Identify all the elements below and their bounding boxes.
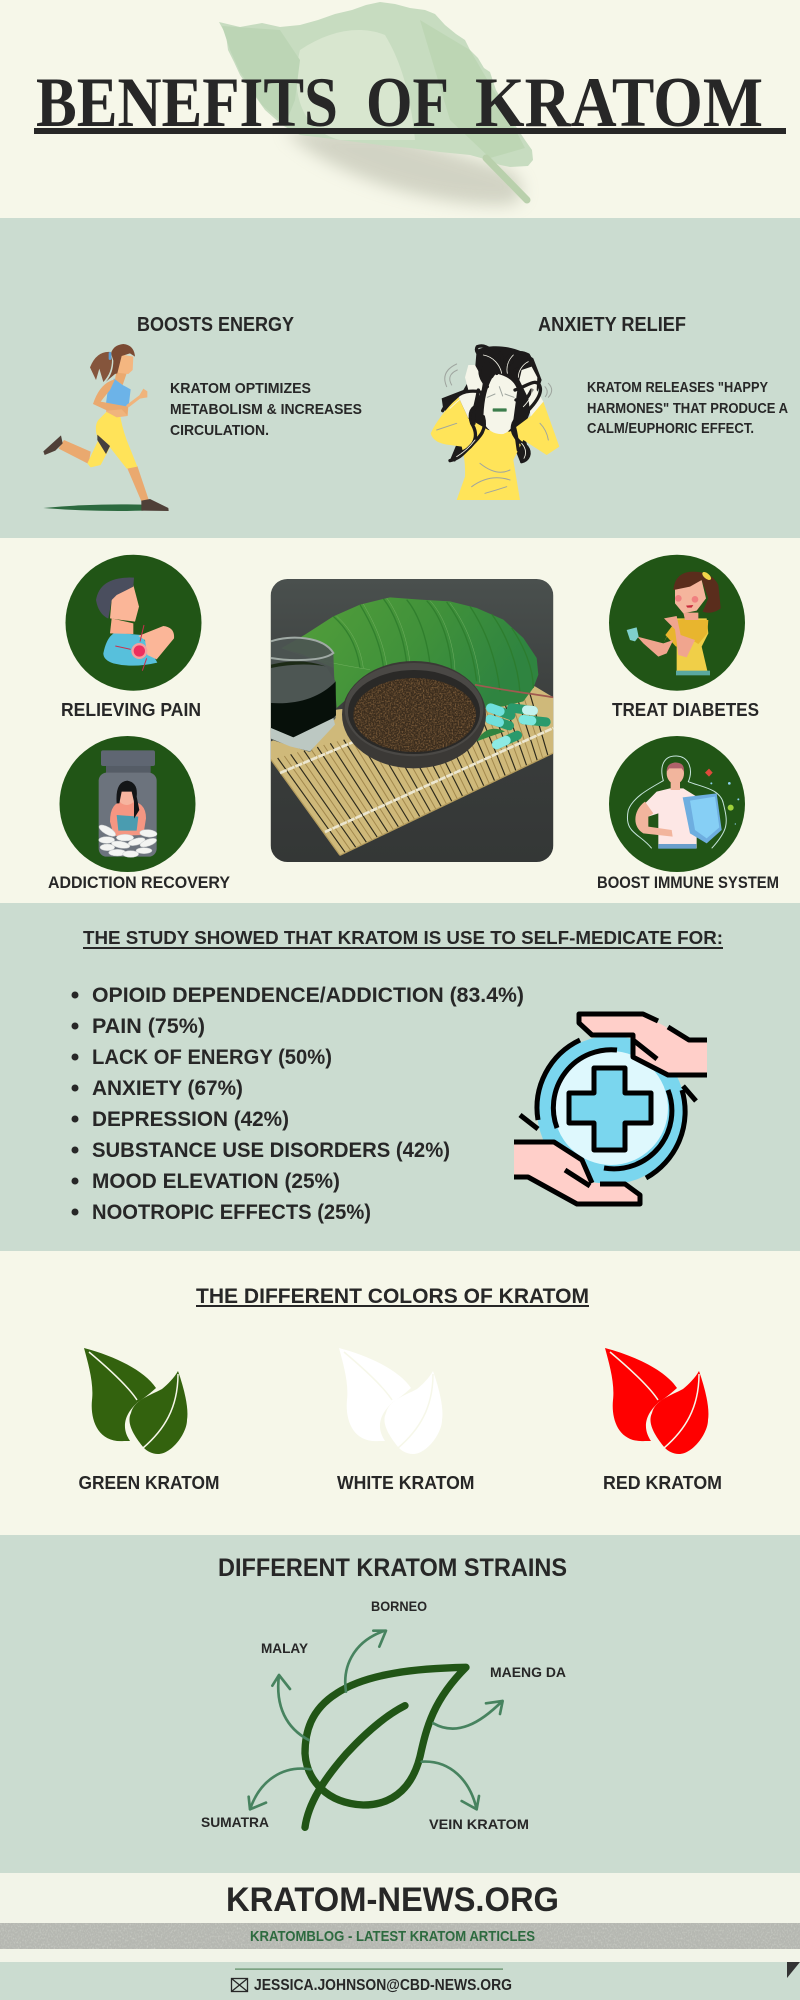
- label: maeng da: MAENG DA: [490, 1664, 566, 1680]
- arrow: malay: [272, 1675, 309, 1740]
- heading: strains: DIFFERENT KRATOM STRAINS: [218, 1554, 567, 1582]
- list: reasons with percentages: LACK OF ENERGY (50%): [92, 1046, 332, 1069]
- label: sumatra: SUMATRA: [201, 1814, 269, 1830]
- photo: kratom leaf, powder, tea and capsules: [271, 579, 553, 862]
- icon: treat diabetes: [609, 555, 745, 691]
- text: anxiety relief description: CALM/EUPHORIC EFFECT.: [587, 421, 754, 437]
- label: red kratom: RED KRATOM: [603, 1473, 722, 1493]
- text: anxiety relief description: KRATOM RELEASES "HAPPY: [587, 380, 768, 396]
- list: reasons with percentages: ANXIETY (67%): [92, 1077, 243, 1100]
- header panel: [34, 2, 786, 205]
- panel: benefit circles and photo: [48, 554, 778, 888]
- mat cords: [280, 728, 553, 832]
- glass of tea: [271, 638, 336, 752]
- icon: hands holding medical cross: [514, 1014, 707, 1204]
- icon: red kratom leaves: [605, 1348, 708, 1454]
- title: BENEFITS: [36, 64, 338, 142]
- text: boosts energy description: KRATOM OPTIMIZES: [170, 380, 311, 397]
- blog tagline: KRATOMBLOG - LATEST KRATOM ARTICLES: [250, 1928, 535, 1945]
- heading: anxiety relief: ANXIETY RELIEF: [538, 314, 686, 336]
- label: treat diabetes: TREAT DIABETES: [612, 699, 759, 720]
- text: boosts energy description: METABOLISM & INCREASES: [170, 401, 362, 418]
- icon: faded background leaf: [219, 2, 533, 205]
- panel: boosts energy and anxiety relief: [0, 218, 800, 538]
- icon: relieving pain: [66, 555, 202, 691]
- label: green kratom: GREEN KRATOM: [78, 1473, 220, 1493]
- arrow: maeng da: [433, 1701, 503, 1729]
- list: reasons with percentages: MOOD ELEVATION (25%): [92, 1170, 340, 1193]
- panel: colors of kratom: [0, 1251, 800, 1535]
- list: reasons with percentages: NOOTROPIC EFFECTS (25%): [92, 1201, 371, 1224]
- grey band: [0, 1923, 800, 1949]
- text: boosts energy description: CIRCULATION.: [170, 422, 269, 439]
- label: relieving pain: RELIEVING PAIN: [61, 699, 201, 720]
- arrow: sumatra: [249, 1769, 311, 1809]
- leaf: [282, 597, 553, 741]
- mat: [271, 686, 553, 855]
- panel: kratom strains: [0, 1535, 800, 1873]
- title: [36, 64, 763, 142]
- heading: study: THE STUDY SHOWED THAT KRATOM IS USE TO SELF-MEDICATE FOR:: [83, 928, 723, 948]
- heading: different colors: THE DIFFERENT COLORS OF KRATOM: [196, 1285, 589, 1308]
- powder: [353, 678, 476, 752]
- list: reasons with percentages: OPIOID DEPENDENCE/ADDICTION (83.4%): [92, 984, 524, 1007]
- icon: white kratom leaves: [339, 1348, 442, 1454]
- label: vein kratom: VEIN KRATOM: [429, 1816, 529, 1832]
- bowl: [342, 661, 486, 768]
- email address: JESSICA.JOHNSON@CBD-NEWS.ORG: [254, 1977, 512, 1994]
- title: OF: [366, 64, 449, 142]
- icon: email envelope: [232, 1978, 248, 1992]
- icon: running woman: [43, 344, 169, 511]
- icon: anxious woman: [431, 346, 559, 500]
- panel: contact: [0, 1962, 800, 2000]
- panel: website footer: [0, 1873, 800, 1962]
- capsules: [490, 708, 546, 745]
- label: addiction recovery: ADDICTION RECOVERY: [48, 873, 231, 892]
- icon: leaf with arrows: [249, 1631, 503, 1827]
- text: boosts energy description: [170, 380, 362, 439]
- icon: addiction recovery: [60, 736, 196, 872]
- website name: KRATOM-NEWS.ORG: [226, 1881, 559, 1919]
- label: boost immune system: BOOST IMMUNE SYSTEM: [597, 873, 779, 892]
- heading: boosts energy: BOOSTS ENERGY: [137, 314, 295, 336]
- corner triangle: [787, 1962, 800, 1978]
- label: malay: MALAY: [261, 1640, 309, 1656]
- list: reasons with percentages: [72, 984, 524, 1224]
- title: KRATOM: [475, 64, 763, 142]
- arrow: vein kratom: [422, 1762, 479, 1809]
- heading underline: [83, 947, 723, 949]
- label: white kratom: WHITE KRATOM: [337, 1473, 474, 1493]
- title underline: [34, 128, 786, 134]
- list: reasons with percentages: PAIN (75%): [92, 1015, 205, 1038]
- arrow: borneo: [345, 1631, 386, 1692]
- list: reasons with percentages: SUBSTANCE USE DISORDERS (42%): [92, 1139, 450, 1162]
- label: borneo: BORNEO: [371, 1598, 427, 1614]
- icon: green kratom leaves: [84, 1348, 187, 1454]
- text: anxiety relief description: [587, 380, 788, 437]
- heading underline: [196, 1305, 589, 1307]
- panel: self-medication study: [0, 903, 800, 1251]
- icon: boost immune system: [609, 736, 745, 872]
- list: reasons with percentages: DEPRESSION (42%): [92, 1108, 289, 1131]
